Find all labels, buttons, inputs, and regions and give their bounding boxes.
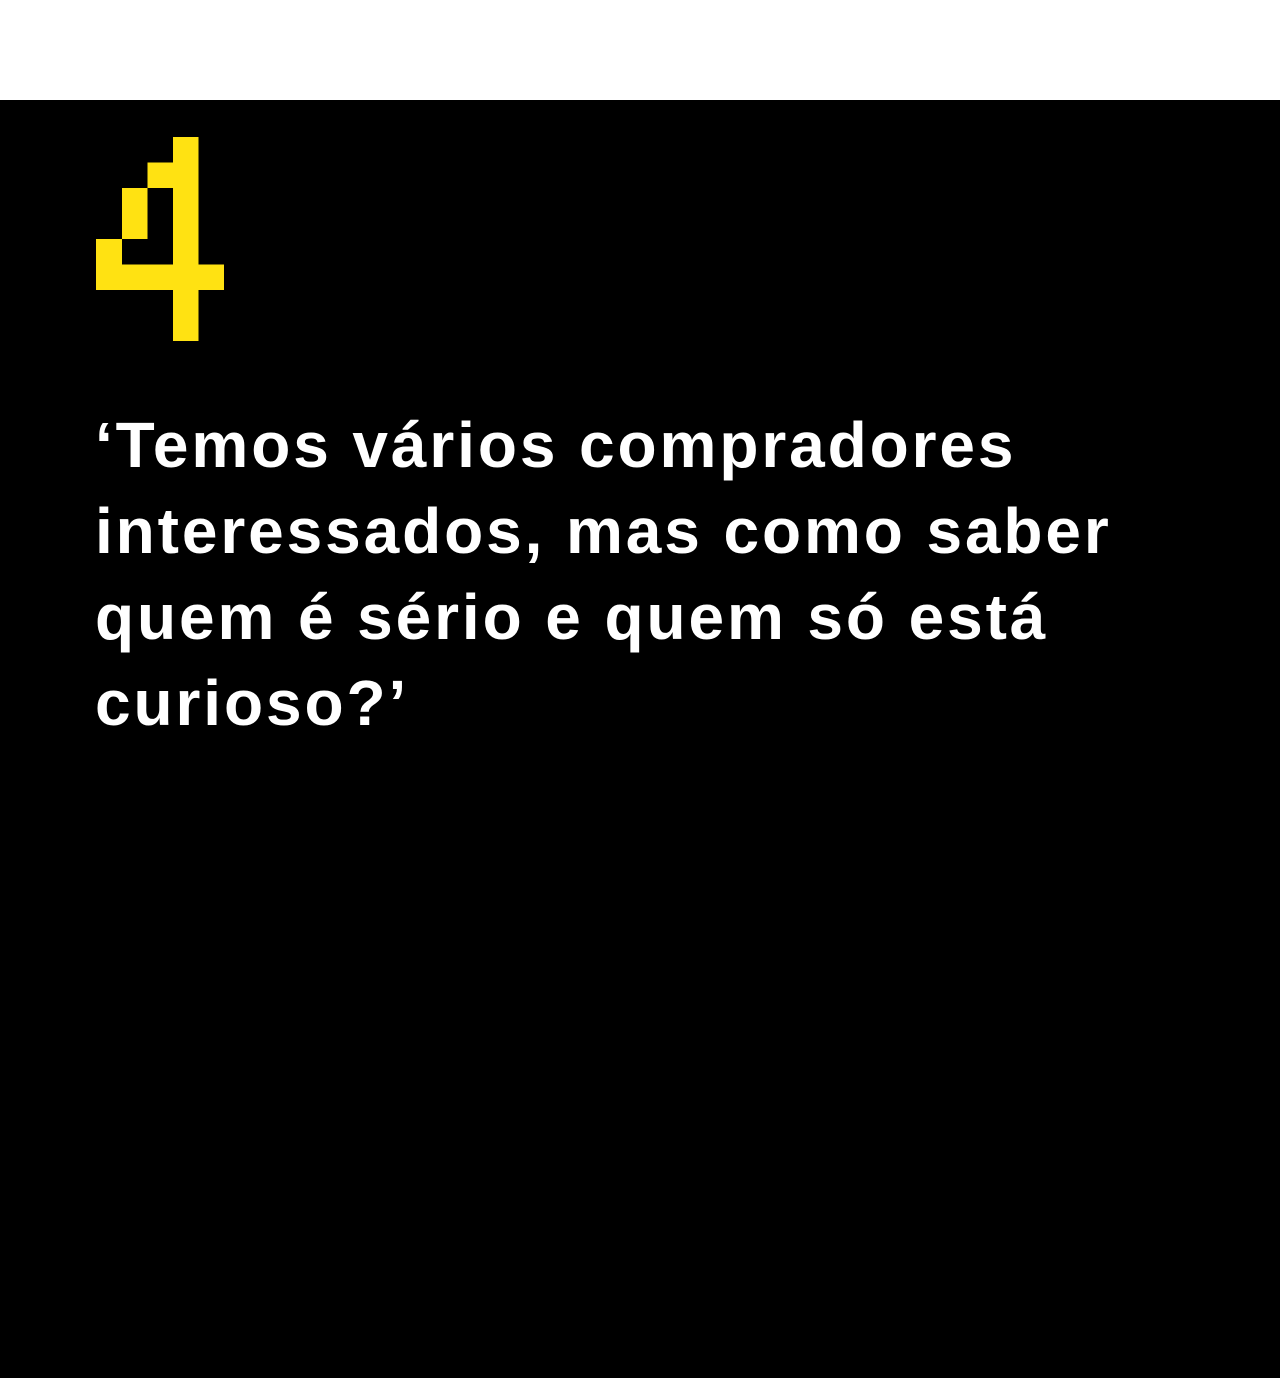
icon: pixel number 4 xyxy=(96,137,224,341)
quote text: curioso?’ xyxy=(95,667,409,739)
quote text xyxy=(95,409,1112,739)
quote text: quem é sério e quem só está xyxy=(95,581,1048,653)
quote text: interessados, mas como saber xyxy=(95,495,1112,567)
quote text: ‘Temos vários compradores xyxy=(95,409,1016,481)
